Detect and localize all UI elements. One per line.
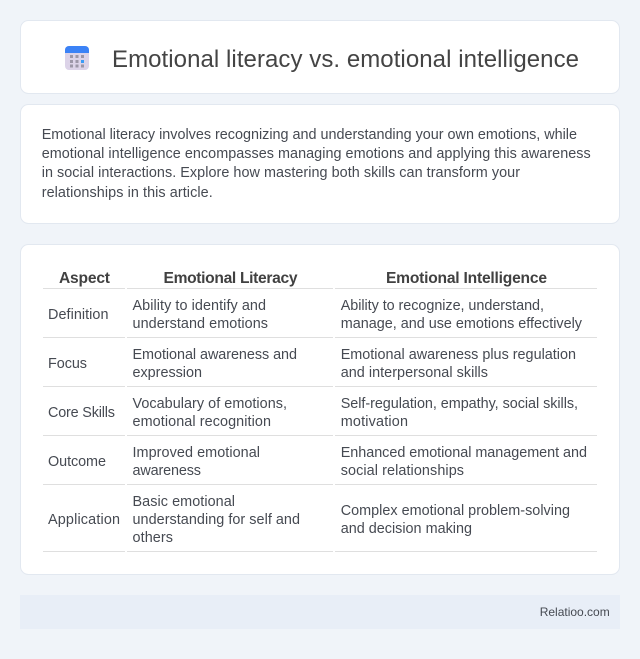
row: application [43,494,597,552]
row: core skills: Core Skills [48,405,115,421]
row: focus [43,347,597,387]
row: focus: Focus [48,356,87,372]
row: outcome [43,445,597,485]
row: definition: manage, and use emotions effectively [341,316,583,332]
row: definition [43,298,597,338]
intro text: Emotional literacy involves recognizing and understanding your own emotions, while [42,127,577,143]
row: core skills [43,396,597,436]
row: outcome: Improved emotional [132,445,260,461]
row: definition: Ability to recognize, understand, [341,298,544,314]
row: core skills: emotional recognition [132,414,271,430]
table header: Emotional Literacy [164,270,298,287]
intro text: relationships in this article. [42,185,213,201]
panel: comparison table [20,244,620,574]
row: outcome: social relationships [341,463,464,479]
intro text: emotional intelligence encompasses managing emotions and applying this awareness [42,146,591,162]
row: focus: Emotional awareness and [132,347,297,363]
footer [20,595,620,629]
row: focus: and interpersonal skills [341,365,488,381]
intro text [42,127,591,201]
row: focus: expression [132,365,202,381]
header panel [20,20,620,94]
row: outcome: Enhanced emotional management and [341,445,587,461]
table header [43,270,597,289]
intro text: in social interactions. Explore how mastering both skills can transform your [42,165,520,181]
row: core skills: Self-regulation, empathy, social skills, [341,396,578,412]
row: application: Basic emotional [132,494,235,510]
row: application: and decision making [341,521,472,537]
row: application: Complex emotional problem-solving [341,503,570,519]
row: core skills: motivation [341,414,408,430]
row: definition: Ability to identify and [132,298,266,314]
row: application: understanding for self and [132,512,300,528]
table header: Aspect [59,270,110,287]
icon: calendar [65,46,89,70]
table header: Emotional Intelligence [386,270,547,287]
row: definition: Definition [48,307,108,323]
row: outcome: Outcome [48,454,106,470]
row: focus: Emotional awareness plus regulation [341,347,576,363]
row: outcome: awareness [132,463,201,479]
row: core skills: Vocabulary of emotions, [132,396,287,412]
row: application: others [132,530,173,546]
footer brand: Relatioo.com [540,605,610,619]
row: definition: understand emotions [132,316,268,332]
row: application: Application [48,512,120,528]
panel: introduction [20,104,620,224]
title: Emotional literacy vs. emotional intelligence [112,46,579,73]
